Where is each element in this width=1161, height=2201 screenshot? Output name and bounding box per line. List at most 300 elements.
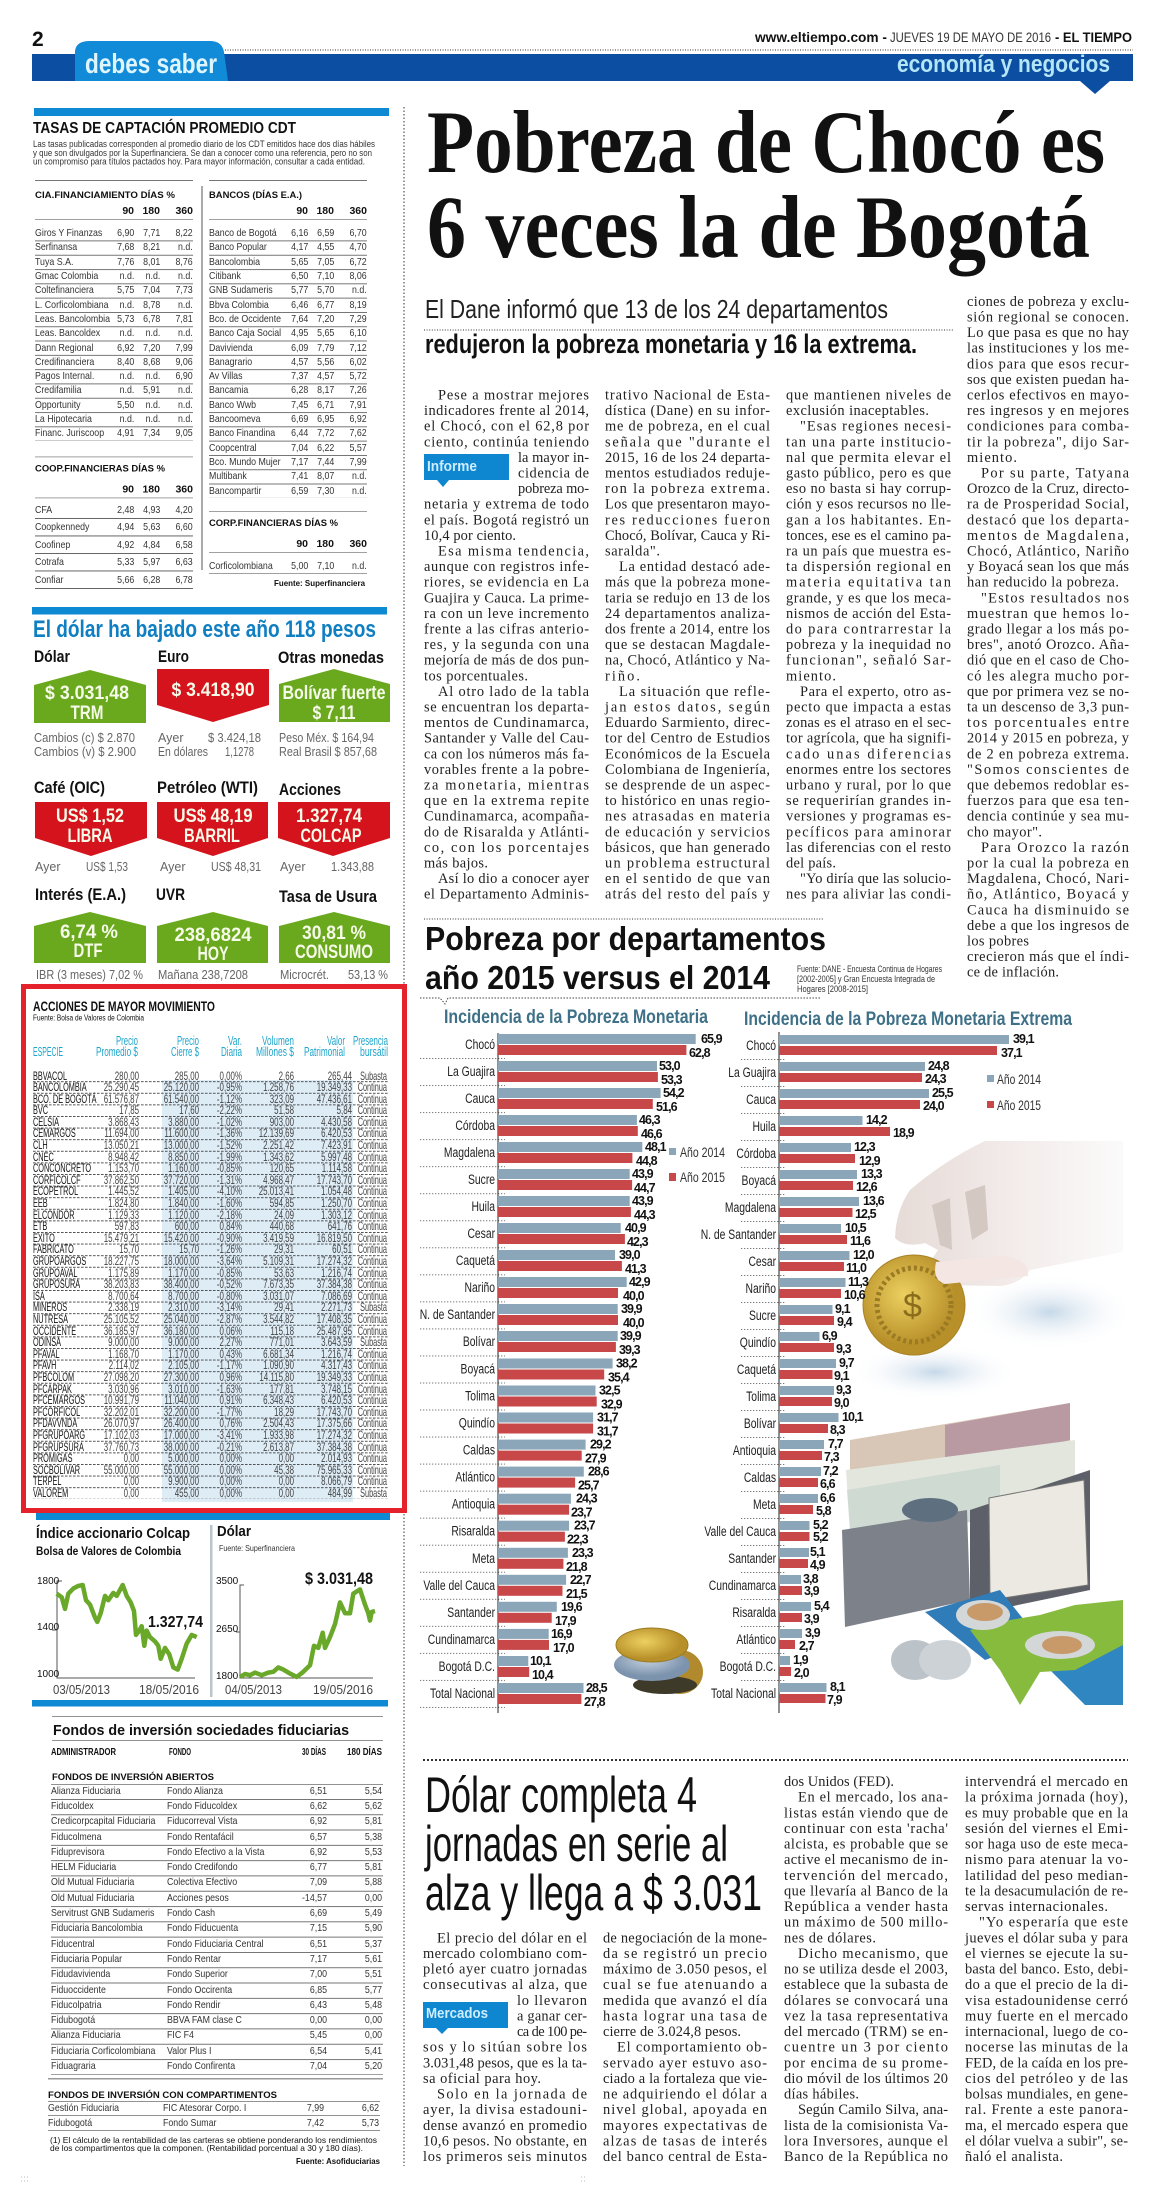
chart: incidencia de la pobreza monetaria extrema: 6,6 [820, 1491, 836, 1505]
column: precio promedio: 280,00 25.290,45 61.576,87 17,85 3.868,43 11.694,00 13.050,21 8.948,42 1.153,70 37.862,50 1.445,52 1.824,80 1.129,33 597,83 15.479,21 15,70 18.227,75 1.175,89 38.203,83 8.700,64 2.338,19 25.105,52 36.185,97 9.000,00 1.168,70 2.114,02 27.098,20 3.030,96 10.991,79 32.202,01 26.070,97 17.102,03 37.760,73 0,00 55.000,00 0,00 0,00 [104, 1068, 139, 1500]
article column 4: res ingresos y en mejores [967, 403, 1129, 419]
section tab: debes saber [75, 41, 228, 81]
article column 3: ción y esos recursos no lle- [786, 497, 951, 513]
article column 1: dense avanzó en promedio [423, 2118, 587, 2134]
tile: interés: Interés (E.A.) [35, 885, 126, 904]
chart: incidencia de la pobreza monetaria: 42,3 [627, 1235, 649, 1249]
tile: euro: $ 3.424,18 [208, 731, 261, 745]
page number: 2 [32, 28, 44, 51]
tile: otras monedas: Peso Méx. $ 164,94 [279, 731, 374, 745]
article column 4: ño, Atlántico, Boyacá y [967, 887, 1130, 903]
chart: incidencia de la pobreza monetaria extrema: Sucre [749, 1307, 776, 1323]
chart: incidencia de la pobreza monetaria: 54,2 [663, 1086, 685, 1100]
column headers [33, 1034, 388, 1059]
chart: incidencia de la pobreza monetaria extrema: 24,3 [925, 1072, 947, 1086]
chart: incidencia de la pobreza monetaria: 43,9 [632, 1167, 654, 1181]
section name: economía y negocios: economía y negocios [897, 51, 1110, 78]
article column 3: urbano y rural, por lo que [786, 778, 951, 794]
chart: incidencia de la pobreza monetaria: N. de Santander [420, 1306, 495, 1322]
chart heading: extrema: Incidencia de la Pobreza Monetaria Extrema [744, 1009, 1072, 1030]
column: presencia bursátil: Subasta Continua Continua Continua Continua Continua Continua Continua Continua Continua Continua Continua Continua Continua Continua Continua Continua Continua Continua Continua Subasta Continua Continua Subasta Continua Continua Continua Continua Continua Continua Continua Continua Continua Continua Continua Continua Subasta [358, 1068, 387, 1500]
chart: incidencia de la pobreza monetaria: 22,7 [570, 1573, 592, 1587]
tile: usura: 53,13 % [348, 968, 388, 982]
article column 2: Económicos de la Escuela [605, 746, 771, 762]
column numbers: 180 [142, 484, 160, 496]
column: compañías de financiamiento: Giros Y Finanzas Serfinansa Tuya S.A. Gmac Colombia Coltefinanciera L. Corficolombiana Leas. Bancolombia Leas. Bancoldex Dann Regional Credifinanciera Pagos Internal. Credifamilia Opportunity La Hipotecaria Financ. Juriscoop [35, 227, 110, 439]
tile: dólar [34, 647, 146, 759]
tile: otras monedas: Otras monedas [278, 648, 384, 667]
note: y que son divulgados por la Superfinanciera. Se dan a conocer como una referencia, pero no son [33, 148, 372, 158]
chart: incidencia de la pobreza monetaria: 23,3 [572, 1546, 594, 1560]
article column 1: sos y lo sitúan sobre los [423, 2040, 587, 2056]
chart: incidencia de la pobreza monetaria extrema: Caldas [744, 1469, 776, 1485]
chart: incidencia de la pobreza monetaria extrema: 3,9 [805, 1626, 821, 1640]
article column 2: alzas de tasas de interés [603, 2134, 767, 2150]
article column 1: el país. Bogotá registró un [424, 512, 589, 528]
callout: Mercados: Mercados [426, 2005, 488, 2022]
article column 3: Banco de la República no [784, 2149, 948, 2165]
article column 3: ta dispersión regional en [786, 559, 951, 575]
chart: incidencia de la pobreza monetaria: 46,6 [641, 1127, 663, 1141]
chart: dólar: 19/05/2016 [313, 1682, 373, 1697]
chart: incidencia de la pobreza monetaria extrema: Chocó [746, 1037, 776, 1053]
chart: incidencia de la pobreza monetaria: 22,3 [567, 1533, 589, 1547]
legend: monetaria: Año 2014 [680, 1145, 725, 1160]
source [797, 964, 942, 995]
chart: incidencia de la pobreza monetaria extrema: Santander [728, 1550, 776, 1566]
article column 1: 10,4 por ciento. [424, 528, 516, 544]
article column 3: lista de la comisionista Va- [784, 2118, 948, 2134]
source: Fuente: Superfinanciera [274, 578, 365, 588]
panel: artículo principal pobreza [424, 94, 1130, 981]
chart: incidencia de la pobreza monetaria: Quindío [459, 1415, 495, 1431]
illustration: hand holding coin: $ [903, 1287, 922, 1325]
chart: incidencia de la pobreza monetaria extrema [701, 1032, 1035, 1713]
chart: incidencia de la pobreza monetaria extrema: 9,4 [837, 1315, 853, 1329]
article column 2: na, Chocó, Atlántico y Na- [605, 653, 770, 669]
article column 4: ñaló el analista. [965, 2149, 1063, 2165]
article column 4: ma, el mercado espera que [965, 2118, 1128, 2134]
column: 30 días: 6,51 6,62 6,92 6,57 6,92 6,77 7,09 -14,57 6,69 7,15 6,51 7,17 7,00 6,85 6,43 0,00 5,45 6,54 7,04 [302, 1785, 327, 2072]
chart: incidencia de la pobreza monetaria: Santander [447, 1604, 495, 1620]
section title [420, 920, 826, 1004]
article column 2: Los que presentaron mayo- [605, 497, 770, 513]
column numbers: 360 [349, 205, 367, 217]
tile: café [34, 778, 147, 874]
column: 360 días: 8,22 n.d. 8,76 n.d. 7,73 n.d. 7,81 n.d. 7,99 9,06 6,90 n.d. n.d. n.d. 9,05 [176, 227, 193, 439]
chart: dólar: Fuente: Superfinanciera [219, 1543, 295, 1553]
column: valor patrimonial: 265,44 19.349,33 47.436,61 5,84 4.430,58 6.420,53 7.423,91 5.997,48 1.114,58 17.743,70 1.054,48 1.250,70 1.303,12 641,76 16.819,50 60,51 17.274,32 1.216,74 37.384,38 7.086,69 2.271,73 17.408,35 25.487,95 3.643,59 1.216,74 4.317,43 19.349,33 3.748,15 6.420,53 17.743,70 17.375,66 17.274,32 37.384,38 2.014,93 75.965,33 8.066,79 484,99 [317, 1068, 352, 1500]
section title: año 2015 versus el 2014 [425, 959, 771, 996]
article column 2: El comportamiento ob- [617, 2040, 767, 2056]
chart: incidencia de la pobreza monetaria extrema: N. de Santander [701, 1226, 776, 1242]
article column 1: do de Risaralda y Atlánti- [424, 824, 589, 840]
article column 4: y Boyacá sean los que más [967, 559, 1129, 575]
article column 2: Chocó, Bolívar, Cauca y Ri- [605, 528, 770, 544]
article column 4: de 2 en pobreza extrema. [967, 746, 1129, 762]
article column 2: en el sentido de que van [605, 871, 770, 887]
title: alza y llega a $ 3.031 [425, 1865, 762, 1921]
chart: incidencia de la pobreza monetaria: 40,9 [625, 1221, 647, 1235]
subheading: FONDOS DE INVERSIÓN CON COMPARTIMENTOS [48, 2089, 277, 2101]
column numbers: 360 [349, 538, 367, 550]
article column 2: dos frente a 2014, entre los [605, 622, 770, 638]
article column 3: continuar con esta 'racha' [784, 1821, 948, 1837]
article column 3: nismos de acción del Esta- [786, 606, 951, 622]
chart: incidencia de la pobreza monetaria extrema: 8,1 [830, 1680, 846, 1694]
article column 1: ra con un leve incremento [424, 606, 589, 622]
column: cooperativas 180: 4,93 5,63 4,84 5,97 6,28 [143, 504, 160, 586]
article column 3: funcionan", señaló Sar- [786, 653, 951, 669]
article column 2: servado ayer estuvo aso- [603, 2055, 767, 2071]
article column 3: República a vender hasta [784, 1899, 949, 1915]
article column 1: mercado colombiano com- [423, 1946, 587, 1962]
chart: incidencia de la pobreza monetaria: 38,2 [616, 1356, 638, 1370]
chart: incidencia de la pobreza monetaria: Antioquia [452, 1496, 495, 1512]
article column 1: ca de 100 pe- [517, 2024, 587, 2040]
article column 2: del banco central de Esta- [603, 2149, 767, 2165]
tile: acciones: Ayer [280, 860, 305, 874]
chart: incidencia de la pobreza monetaria: 31,7 [597, 1424, 619, 1438]
chart: incidencia de la pobreza monetaria: 28,5 [586, 1681, 608, 1695]
article column 2: 2015, 16 de los 24 departa- [605, 450, 770, 466]
article column 3: Para el experto, otro as- [800, 684, 951, 700]
chart: incidencia de la pobreza monetaria extrema: 9,1 [834, 1369, 850, 1383]
article column 3: En el mercado, los ana- [798, 1790, 948, 1806]
article column 2: nes atrasadas en materia [605, 809, 771, 825]
article column 3: dio móvil de los últimos 20 [784, 2071, 948, 2087]
article column 4: FED, de la caída en los pre- [965, 2055, 1128, 2071]
column numbers: 90 [296, 205, 308, 217]
column: volumen: 2,66 1.258,76 323,09 51,58 903,00 12.139,69 2.251,42 1.343,62 120,65 4.968,47 25.013,41 594,85 24,09 440,68 3.419,59 29,31 5.109,31 53,63 7.673,35 3.031,07 29,41 3.544,82 115,18 771,01 6.681,34 1.090,90 14.115,80 177,81 6.348,43 18,29 2.504,43 1.933,98 2.613,87 0,00 45,38 0,00 0,00 [259, 1068, 294, 1500]
article column 3: tor agrícola, que ha signifi- [786, 731, 951, 747]
chart: incidencia de la pobreza monetaria extrema: Valle del Cauca [704, 1523, 776, 1539]
chart: índice Colcap [36, 1525, 203, 1697]
article column 3: active el mecanismo de in- [784, 1852, 948, 1868]
chart: dólar: 3500 [216, 1576, 239, 1587]
article column 1: Así lo dio a conocer ayer [438, 871, 589, 887]
article column 4: sesión del viernes el Emi- [965, 1821, 1128, 1837]
column headers: Diaria [221, 1045, 242, 1059]
article column 4: te la desacumulación de re- [965, 1883, 1128, 1899]
chart: incidencia de la pobreza monetaria: Bogotá D.C. [439, 1658, 495, 1674]
article column 3: que mantienen niveles de [786, 388, 951, 404]
chart: incidencia de la pobreza monetaria extrema: 7,9 [827, 1693, 843, 1707]
article column 3 [784, 1774, 949, 2165]
article column 4: do a que el precio de la di- [965, 1977, 1128, 1993]
article column 3: por encima de su prome- [784, 2055, 948, 2071]
subheading: FONDOS DE INVERSIÓN ABIERTOS [52, 1771, 214, 1783]
table headers [35, 190, 339, 529]
article column 3: Según Camilo Silva, ana- [798, 2102, 948, 2118]
chart: incidencia de la pobreza monetaria extrema: Bolívar [744, 1415, 776, 1431]
chart: incidencia de la pobreza monetaria extrema: La Guajira [728, 1064, 776, 1080]
article column 4: sor haga uso de este meca- [965, 1836, 1128, 1852]
article column 4: sos que existen puedan ha- [967, 372, 1129, 388]
article column 4: debe a que los ingresos de [967, 918, 1129, 934]
column: precio cierre: 285,00 25.120,00 61.540,00 17,60 3.880,00 11.600,00 13.000,00 8.850,00 1.160,00 37.720,00 1.405,00 1.840,00 1.120,00 600,00 15.420,00 15,70 18.000,00 1.170,00 38.400,00 8.700,00 2.310,00 25.040,00 36.180,00 9.000,00 1.170,00 2.105,00 27.300,00 3.010,00 11.040,00 32.200,00 26.400,00 17.000,00 38.000,00 5.000,00 55.000,00 9.900,00 455,00 [164, 1068, 199, 1500]
red frame [24, 986, 404, 1510]
article column 3: grande, y es que los meca- [786, 590, 951, 606]
tile: UVR [156, 885, 268, 982]
chart: incidencia de la pobreza monetaria: 17,9 [555, 1614, 577, 1628]
article column 2: ciado a la fortaleza que vie- [603, 2071, 767, 2087]
tile: usura [279, 887, 390, 982]
chart: incidencia de la pobreza monetaria extrema: 24,8 [928, 1059, 950, 1073]
callout: Informe: Informe [427, 458, 477, 475]
tile: café: LIBRA [68, 826, 113, 847]
chart: incidencia de la pobreza monetaria: 35,4 [608, 1370, 630, 1384]
chart: incidencia de la pobreza monetaria extrema: 6,6 [820, 1477, 836, 1491]
article column 4: jueves el dólar suba y para [964, 1930, 1129, 1946]
tile: UVR: Mañana 238,7208 [158, 968, 248, 982]
article column 4: crecieron más que el índi- [967, 949, 1129, 965]
subtitle: El Dane informó que 13 de los 24 departamentos [425, 294, 888, 324]
chart: incidencia de la pobreza monetaria: Valle del Cauca [423, 1577, 495, 1593]
chart: incidencia de la pobreza monetaria: Boyacá [461, 1361, 495, 1377]
note [33, 139, 375, 166]
column headers: Precio [177, 1034, 199, 1048]
legend: extrema: Año 2014 [997, 1072, 1041, 1087]
article column 3: nes para aliviar las condi- [786, 887, 951, 903]
title: Dólar completa 4 [425, 1767, 697, 1823]
tile: petróleo: US$ 48,19 [174, 806, 252, 827]
dateline: - EL TIEMPO [1055, 29, 1132, 45]
article column 4: dencia continúe y sea mu- [967, 809, 1129, 825]
article column 1: ciento, continúa teniendo [424, 434, 589, 450]
article column 2: de negociación de la mone- [603, 1930, 767, 1946]
article column 1: tos porcentuales. [424, 668, 528, 684]
article column 2: Eduardo Sarmiento, direc- [605, 715, 770, 731]
chart heading: monetaria: Incidencia de la Pobreza Monetaria [444, 1007, 708, 1028]
article column 4: grado llegar a los más po- [967, 622, 1129, 638]
chart: incidencia de la pobreza monetaria: 48,1 [645, 1140, 667, 1154]
title [424, 1767, 762, 1921]
chart: incidencia de la pobreza monetaria: Risaralda [451, 1523, 495, 1539]
column headers: Millones $ [256, 1045, 294, 1059]
article column 2: cual se fue atenuando a [603, 1977, 768, 1993]
chart: incidencia de la pobreza monetaria: Sucre [468, 1171, 495, 1187]
article column 4: "Yo esperaría que este [979, 1915, 1128, 1931]
footnote [50, 2135, 377, 2153]
article column 1: ca con los números más fa- [424, 746, 589, 762]
tile: dólar: Cambios (c) $ 2.870 [34, 731, 135, 745]
article column 2: un problema estructural [605, 856, 770, 872]
chart: incidencia de la pobreza monetaria extrema: 5,8 [816, 1504, 832, 1518]
tile: otras monedas: $ 7,11 [312, 703, 356, 724]
article column 2: cierre de 3.024,8 pesos. [603, 2024, 741, 2040]
chart: índice Colcap: 1.327,74 [148, 1614, 203, 1631]
tile: acciones: 1.343,88 [331, 860, 374, 874]
tile: otras monedas: Real Brasil $ 857,68 [279, 745, 377, 759]
article column 4: nismo para atenuar la vo- [965, 1852, 1128, 1868]
article column 3: se requerirían grandes in- [786, 793, 951, 809]
article column 2: res reducciones fueron [605, 512, 770, 528]
article column 4: dió que en el caso de Cho- [967, 653, 1129, 669]
article column 2: nivel global, apoyada en [603, 2102, 767, 2118]
tile: usura: Tasa de Usura [279, 887, 377, 906]
chart: incidencia de la pobreza monetaria extrema: 3,9 [804, 1584, 820, 1598]
chart: incidencia de la pobreza monetaria extrema: 11,6 [850, 1234, 871, 1248]
chart: incidencia de la pobreza monetaria: 39,9 [620, 1329, 642, 1343]
header band [32, 28, 1133, 94]
article column 1: Santander y Valle del Cau- [424, 731, 589, 747]
chart: incidencia de la pobreza monetaria extrema: 12,6 [856, 1180, 878, 1194]
column headers: FONDO [169, 1747, 191, 1758]
article column 4: tir la pobreza", dijo Sar- [967, 434, 1129, 450]
chart: incidencia de la pobreza monetaria extrema: 39,1 [1013, 1032, 1035, 1046]
chart: incidencia de la pobreza monetaria extrema: Cauca [746, 1091, 776, 1107]
article column 2: dística (Dane) en su infor- [605, 403, 770, 419]
article column 3: exclusión inaceptables. [786, 403, 929, 419]
article column 4: Magdalena, Chocó, Nari- [967, 871, 1129, 887]
article column 1: Solo en la jornada de [437, 2087, 587, 2103]
chart: incidencia de la pobreza monetaria extrema: 1,9 [793, 1653, 809, 1667]
table headers: COOP.FINANCIERAS DÍAS % [35, 464, 166, 474]
chart: dólar: Dólar [217, 1523, 251, 1540]
article column 4: có les alegra mucho por- [967, 668, 1129, 684]
chart: incidencia de la pobreza monetaria: 43,9 [632, 1194, 654, 1208]
tile: petróleo: Petróleo (WTI) [157, 778, 258, 797]
tile: café: Café (OIC) [34, 778, 105, 797]
tile: interés: 6,74 % [60, 922, 118, 943]
article column 1: más bajos. [424, 856, 488, 872]
chart: incidencia de la pobreza monetaria extrema: Cesar [748, 1253, 776, 1269]
article column 1: el Chocó, con el 62,8 por [424, 419, 589, 435]
chart: incidencia de la pobreza monetaria: 40,0 [623, 1316, 645, 1330]
row: Corficolombiana: Corficolombiana [209, 560, 273, 572]
chart: incidencia de la pobreza monetaria extrema: Boyacá [742, 1172, 776, 1188]
article column 4: dios para que esos recur- [967, 356, 1129, 372]
chart: incidencia de la pobreza monetaria extrema: 11,3 [848, 1275, 869, 1289]
chart: dólar [216, 1523, 375, 1697]
panel: fondos de inversión [48, 1716, 383, 2166]
column headers: bursátil [360, 1045, 388, 1059]
article column 2: medida que avanzó el día [603, 1993, 768, 2009]
title: jornadas en serie al [424, 1816, 728, 1872]
tile: usura: 30,81 % [302, 923, 366, 944]
footnote: de los compartimentos que la componen. (Rentabilidad porcentual a 30 y 180 días). [50, 2143, 363, 2153]
article column 1: 10,6 pesos. No obstante, en [423, 2134, 587, 2150]
article column 1: 3.031,48 pesos, que es la ta- [423, 2055, 587, 2071]
article column 2: atrás del resto del país y [605, 887, 771, 903]
article column 1: consecutivas al alza, que [423, 1977, 587, 1993]
article column 3: pecto que impacta a estas [786, 700, 951, 716]
article column 3 [786, 388, 952, 903]
chart: incidencia de la pobreza monetaria extrema: 4,9 [810, 1558, 826, 1572]
article column 1: lo llevaron [517, 1993, 587, 2009]
illustration: hand holding coin [850, 1141, 1135, 1400]
column: administrador: Alianza Fiduciaria Fiducoldex Credicorpcapital Fiduciaria Fiducolmena Fiduprevisora HELM Fiduciaria Old Mutual Fiduciaria Old Mutual Fiduciaria Servitrust GNB Sudameris Fiduciaria Bancolombia Fiducentral Fiduciaria Popular Fidudavivienda Fiduoccidente Fiducolpatria Fidubogotá Alianza Fiduciaria Fiduciaria Corficolombiana Fiduagraria [51, 1785, 155, 2072]
chart: incidencia de la pobreza monetaria extrema: 9,1 [835, 1302, 851, 1316]
column: bancos: Banco de Bogotá Banco Popular Bancolombia Citibank GNB Sudameris Bbva Colombia Bco. de Occidente Banco Caja Social Davivienda Banagrario Av Villas Bancamia Banco Wwb Bancoomeva Banco Finandina Coopcentral Bco. Mundo Mujer Multibank Bancompartir [209, 227, 281, 497]
note: Las tasas publicadas corresponden al promedio diario de los CDT emitidos hace dos días hábiles [33, 139, 375, 149]
article column 3: zonas es el atraso en el sec- [786, 715, 951, 731]
tile: euro: En dólares [158, 745, 208, 759]
chart: incidencia de la pobreza monetaria: 10,1 [530, 1654, 552, 1668]
panel: gráficos Colcap y dólar [32, 1513, 390, 1706]
chart: incidencia de la pobreza monetaria extrema: Nariño [746, 1280, 776, 1296]
chart: incidencia de la pobreza monetaria extrema: 7,3 [824, 1450, 840, 1464]
panel: tasas de captación CDT [33, 108, 389, 589]
callout: Informe [424, 454, 509, 487]
article column 4: ciones de pobreza y exclu- [967, 294, 1129, 310]
article column 2: taria se redujo en 13 de los [605, 590, 770, 606]
column numbers: 90 [296, 538, 308, 550]
source: Hogares [2008-2015] [797, 984, 868, 995]
tile: euro [157, 647, 269, 759]
article column 1: ayer, la divisa estadouni- [423, 2102, 587, 2118]
chart: índice Colcap: 18/05/2016 [139, 1682, 199, 1697]
article column 4: miento. [967, 450, 1017, 466]
article column 3: cado unas diferencias [786, 746, 951, 762]
chart: incidencia de la pobreza monetaria extrema: 5,1 [810, 1545, 826, 1559]
chart: incidencia de la pobreza monetaria extrema: 8,3 [830, 1423, 846, 1437]
article column 3: lora Inversores, aunque el [784, 2134, 948, 2150]
footnote: (1) El cálculo de la rentabilidad de las carteras se obtiene ponderando los rendimientos [50, 2135, 377, 2145]
article column 3: un máximo de 500 millo- [784, 1915, 948, 1931]
tile: euro: Euro [158, 647, 189, 666]
column: compartimentos 180 días: 6,62 5,73 [362, 2102, 379, 2129]
chart: incidencia de la pobreza monetaria extrema: Tolima [746, 1388, 776, 1404]
chart: incidencia de la pobreza monetaria: Atlántico [455, 1469, 495, 1485]
chart: incidencia de la pobreza monetaria extrema: 18,9 [893, 1126, 915, 1140]
row: Corficolombiana 90: 5,00 [291, 560, 308, 572]
column headers: Volumen [262, 1034, 294, 1048]
panel: pobreza por departamentos [420, 918, 1123, 1713]
chart: índice Colcap: Bolsa de Valores de Colombia [36, 1544, 181, 1558]
article column 4: muy fuerte en el mercado [965, 2008, 1128, 2024]
column: bancos 180: 6,59 4,55 7,05 7,10 5,70 6,77 7,20 5,65 7,79 5,56 4,57 8,17 6,71 6,95 7,72 6,22 7,44 8,07 7,30 [317, 227, 334, 497]
chart: incidencia de la pobreza monetaria extrema: Meta [753, 1496, 776, 1512]
chart: incidencia de la pobreza monetaria: 51,6 [656, 1100, 678, 1114]
tile: acciones: COLCAP [300, 826, 362, 847]
article column 4: destacó que los departa- [967, 512, 1129, 528]
chart: incidencia de la pobreza monetaria extrema: 2,0 [794, 1666, 810, 1680]
article column 3: nal que permita elevar el [786, 450, 951, 466]
chart: incidencia de la pobreza monetaria extrema: 10,5 [845, 1221, 867, 1235]
article column 3: tonces, ese es el camino pa- [786, 528, 951, 544]
chart: incidencia de la pobreza monetaria: Caldas [463, 1442, 495, 1458]
chart: dólar: 2650 [216, 1624, 239, 1635]
article column 4: intervendrá el mercado en [965, 1774, 1128, 1790]
article column 2 [603, 1930, 768, 2165]
column: fondo: Fondo Alianza Fondo Fiducoldex Fiducorreval Vista Fondo Rentafácil Fondo Efectivo a la Vista Fondo Credifondo Colectiva Efectivo Acciones pesos Fondo Cash Fondo Fiducuenta Fondo Fiduciaria Central Fondo Rentar Fondo Superior Fondo Occirenta Fondo Rendir BBVA FAM clase C FIC F4 Valor Plus I Fondo Confirenta [167, 1785, 264, 2072]
tile: petróleo [157, 778, 268, 874]
article column 2: básicos, que han generado [605, 840, 770, 856]
article column 3: las diferencias con el resto [786, 840, 951, 856]
tile: otras monedas: Bolívar fuerte [282, 683, 386, 704]
article column 3: pobreza y la inequidad no [786, 637, 951, 653]
chart: incidencia de la pobreza monetaria extrema: 37,1 [1001, 1046, 1023, 1060]
chart: incidencia de la pobreza monetaria: 10,4 [532, 1668, 554, 1682]
callout: Mercados [423, 2002, 508, 2034]
chart: incidencia de la pobreza monetaria extrema: 5,4 [814, 1599, 830, 1613]
article column 4 [964, 1774, 1129, 2165]
chart: dólar: 1800 [216, 1671, 239, 1682]
chart: incidencia de la pobreza monetaria extrema: Caquetá [737, 1361, 776, 1377]
row: Corficolombiana 360: n.d. [352, 560, 367, 572]
article column 4: el viernes se ejecute la su- [965, 1946, 1128, 1962]
article column 4: Orozco de la Cruz, directo- [967, 481, 1129, 497]
article column 4: "Estos resultados nos [981, 590, 1129, 606]
chart: incidencia de la pobreza monetaria: 28,6 [588, 1465, 610, 1479]
column numbers: 90 [122, 205, 134, 217]
chart: índice Colcap: 1800 [37, 1576, 60, 1587]
article column 4: visa estadounidense cerró [965, 1993, 1128, 2009]
chart: incidencia de la pobreza monetaria: 44,7 [634, 1181, 656, 1195]
chart: incidencia de la pobreza monetaria extrema: 12,0 [853, 1248, 875, 1262]
